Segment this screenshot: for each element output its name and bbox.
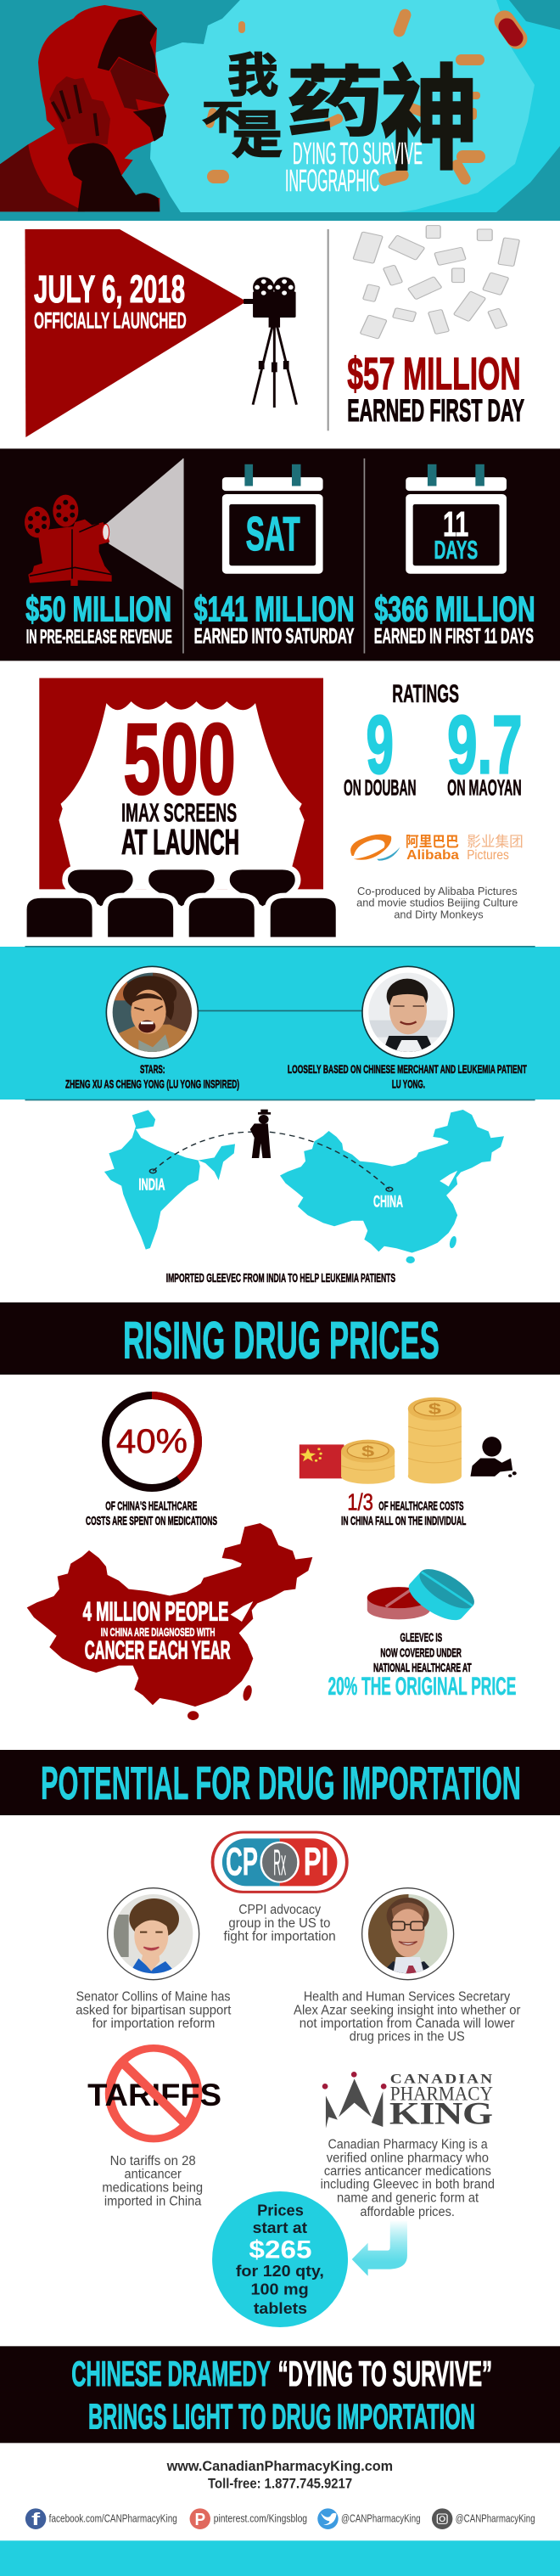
logo: CPPI: PI: [304, 1841, 328, 1884]
panel: launch date and first-day earnings: [25, 226, 524, 437]
stat: $141 million into Saturday: EARNED INTO SATURDAY: [194, 623, 355, 648]
portrait: Senator Collins: [108, 1888, 199, 1980]
Chinese film title: 不: [202, 99, 244, 137]
caption: one third of costs fall on individual: 1/3: [347, 1489, 373, 1516]
contact details: [166, 2459, 393, 2492]
social: Instagram: [432, 2508, 535, 2529]
chart: 40 percent ring: 40%: [116, 1423, 188, 1460]
callout: price circle: 100 mg: [251, 2281, 309, 2298]
stat: $50 million pre-release: [25, 590, 172, 648]
icon: coin stacks: $: [361, 1443, 375, 1460]
panel: stars and real-life inspiration: ZHENG XU AS CHENG YONG (LU YONG INSPIRED): [65, 1078, 239, 1091]
text: Canadian Pharmacy King description: name and generic form at: [337, 2190, 479, 2205]
text: cancer diagnosis stat on map: IN CHINA ARE DIAGNOSED WITH: [101, 1626, 215, 1640]
text: no tariffs: imported in China: [104, 2194, 202, 2208]
portrait: Alex Azar: [362, 1888, 454, 1980]
icon: red movie projector: [25, 495, 112, 586]
chart: 40 percent ring: [105, 1396, 199, 1488]
map: China in red: [27, 1523, 312, 1720]
social: Pinterest: [190, 2508, 307, 2529]
text: Senator Collins: [76, 1989, 232, 2031]
text: Canadian Pharmacy King description: affordable prices.: [360, 2204, 455, 2219]
logo: Alibaba Pictures: [350, 834, 524, 863]
stat: ratings: ON DOUBAN: [344, 775, 416, 800]
projector beam with launch date: JULY 6, 2018: [34, 268, 185, 311]
logo: Canadian Pharmacy King: CANADIAN: [390, 2071, 493, 2086]
stat: ratings: RATINGS: [392, 679, 459, 708]
closing banner: [0, 2346, 560, 2443]
caption: Gleevec covered at 20 percent of original price: [328, 1632, 516, 1700]
footer bar: [0, 2540, 560, 2576]
callout: price circle: start at: [253, 2219, 307, 2236]
social: Twitter: @CANPharmacyKing: [341, 2513, 421, 2525]
icon: China flag: [300, 1444, 344, 1478]
text: CPPI advocacy: CPPI advocacy: [238, 1902, 321, 1917]
stat: ratings: [344, 679, 523, 800]
text: Canadian Pharmacy King description: [321, 2137, 495, 2219]
arrow: pointing to price circle: [352, 2220, 407, 2276]
icon: coin stacks: $: [428, 1400, 442, 1417]
icon: man silhouette covering his ear: [0, 5, 169, 211]
text: co-production note: and movie studios Beijing Culture: [356, 897, 518, 908]
social: Facebook: f: [31, 2510, 40, 2528]
pills scattered around the title: [204, 7, 531, 187]
logo: CPPI: [212, 1832, 347, 1892]
callout: price circle: $265: [249, 2236, 312, 2264]
callout: price circle: tablets: [254, 2299, 307, 2317]
stat: ratings: 9: [367, 698, 394, 790]
social: Facebook: [25, 2508, 177, 2529]
caption: stars: STARS:: [140, 1064, 165, 1077]
illustration: theatre with curtains and seats: [0, 678, 560, 946]
contact details: Toll-free: 1.877.745.9217: [208, 2477, 352, 2492]
icon: man in hat walking: [250, 1110, 271, 1158]
callout: price circle: Prices: [257, 2202, 304, 2219]
Chinese film title: 我: [227, 49, 278, 102]
illustration: theatre with curtains and seats: IMAX SCREENS: [121, 798, 237, 827]
panel: drug price facts: OF HEALTHCARE COSTS: [378, 1500, 464, 1513]
caption: based on: [288, 1064, 527, 1091]
icon: no tariffs sign: TARIFFS: [87, 2078, 221, 2112]
icon: calendar 11 days: [406, 464, 507, 574]
banner: movie title header: [0, 0, 560, 221]
banner title: Dying to Survive Infographic: INFOGRAPHIC: [285, 163, 379, 198]
social: Pinterest: P: [194, 2510, 205, 2528]
text: Secretary Azar: drug prices in the US: [350, 2029, 465, 2044]
Chinese film title: 药: [286, 61, 384, 146]
text: Senator Collins: for importation reform: [92, 2016, 215, 2031]
logo: CPPI: Rx: [273, 1842, 286, 1883]
heading: Rising Drug Prices: [0, 1302, 560, 1375]
stat: $141 million into Saturday: [194, 590, 355, 648]
panel: stars and real-life inspiration: [0, 946, 560, 1285]
panel: importation advocates: [76, 1832, 521, 2219]
logo: Alibaba Pictures: 影业集团: [467, 834, 524, 850]
text: co-production note: Co-produced by Alibaba Pictures: [357, 885, 518, 897]
text: Senator Collins: Senator Collins of Maine has: [76, 1989, 231, 2004]
panel: box office stats band: [0, 448, 560, 946]
panel: drug price facts: [83, 1398, 517, 1700]
icon: calendar 11 days: DAYS: [434, 535, 478, 564]
social: Facebook: facebook.com/CANPharmacyKing: [49, 2513, 177, 2525]
text: Canadian Pharmacy King description: Canadian Pharmacy King is a: [328, 2137, 488, 2151]
closing banner: CHINESE DRAMEDY: [71, 2354, 271, 2393]
icon: Gleevec pills: [367, 1562, 482, 1627]
text: CPPI advocacy: [224, 1902, 336, 1943]
caption: one third of costs fall on individual: [341, 1489, 467, 1528]
text: co-production note: [356, 885, 518, 920]
logo: CPPI: CP: [226, 1841, 258, 1884]
contact details: www.CanadianPharmacyKing.com: [166, 2459, 393, 2474]
text: cancer diagnosis stat on map: 4 MILLION PEOPLE: [83, 1597, 228, 1627]
stat: $50 million pre-release: IN PRE-RELEASE REVENUE: [26, 626, 172, 648]
text: Canadian Pharmacy King description: including Gleevec in both brand: [321, 2177, 495, 2191]
logo: Alibaba Pictures: Alibaba: [406, 847, 460, 863]
stat: $366 million in first 11 days: [374, 590, 535, 648]
arrow: dashed route from India to China: [149, 1132, 393, 1191]
panel: price callout and footer: [0, 2191, 560, 2576]
icon: no tariffs sign: [87, 2048, 221, 2139]
text: CPPI advocacy: group in the US to: [228, 1915, 330, 1931]
Chinese film title: 神: [380, 56, 479, 184]
text: Secretary Azar: [294, 1989, 521, 2044]
caption: healthcare spending on medications: OF CHINA'S HEALTHCARE: [105, 1500, 198, 1513]
logo: Canadian Pharmacy King: PHARMACY: [390, 2082, 493, 2105]
map: India: [104, 1110, 235, 1250]
logo: Canadian Pharmacy King: [322, 2071, 493, 2131]
map: India: INDIA: [138, 1175, 165, 1194]
stat: $57 million earned first day: [347, 348, 524, 428]
Chinese film title: 是: [232, 107, 283, 164]
text: no tariffs: anticancer: [125, 2167, 182, 2181]
map: China in cyan: CHINA: [373, 1193, 403, 1212]
caption: Gleevec covered at 20 percent of original price: GLEEVEC IS: [400, 1632, 442, 1645]
projector beam with launch date: OFFICIALLY LAUNCHED: [34, 309, 187, 334]
projector beam with launch date: [25, 229, 246, 437]
stat: $141 million into Saturday: $141 MILLION: [194, 590, 355, 629]
caption: based on: LU YONG.: [392, 1078, 425, 1091]
illustration: theatre with curtains and seats: AT LAUNCH: [121, 823, 239, 863]
caption: Gleevec covered at 20 percent of original price: NOW COVERED UNDER: [380, 1646, 462, 1660]
social: Pinterest: pinterest.com/Kingsblog: [214, 2513, 307, 2525]
caption: healthcare spending on medications: [86, 1500, 217, 1528]
portrait: Lu Yong: [362, 966, 454, 1058]
icon: calendar 11 days: 11: [443, 505, 468, 544]
banner title: Dying to Survive Infographic: [285, 136, 423, 198]
text: Canadian Pharmacy King description: carries anticancer medications: [324, 2163, 491, 2179]
stat: $50 million pre-release: $50 MILLION: [25, 590, 171, 629]
projector beam: [105, 458, 183, 590]
icon: coin stacks: [341, 1398, 462, 1484]
callout: price circle: [212, 2191, 348, 2327]
panel: drug price facts: CANCER EACH YEAR: [85, 1636, 231, 1664]
text: CPPI advocacy: fight for importation: [224, 1929, 336, 1943]
icon: falling money bills: [353, 226, 519, 339]
text: Canadian Pharmacy King description: verified online pharmacy who: [327, 2150, 489, 2165]
panel: drug price facts: COSTS ARE SPENT ON MEDICATIONS: [86, 1515, 217, 1528]
text: no tariffs: medications being: [102, 2180, 203, 2195]
logo: Alibaba Pictures: Pictures: [467, 847, 509, 863]
portrait: Zheng Xu: [106, 966, 198, 1058]
map: China in cyan: [280, 1110, 504, 1263]
text: no tariffs: [102, 2153, 203, 2208]
Chinese film title: [202, 49, 479, 184]
illustration: theatre with curtains and seats: 500: [123, 704, 236, 816]
callout: price circle: for 120 qty,: [236, 2262, 324, 2280]
text: Senator Collins: asked for bipartisan support: [76, 2002, 232, 2017]
social: Twitter: [317, 2508, 421, 2529]
icon: film camera on tripod: [244, 277, 296, 408]
caption: stars: [65, 1064, 239, 1091]
icon: calendar SAT: SAT: [246, 507, 300, 561]
logo: Alibaba Pictures: 阿里巴巴: [406, 834, 459, 850]
icon: calendar SAT: [222, 464, 323, 574]
text: no tariffs: No tariffs on 28: [110, 2153, 196, 2168]
text: co-production note: and Dirty Monkeys: [394, 908, 484, 920]
text: cancer diagnosis stat on map: [83, 1597, 231, 1664]
logo: Canadian Pharmacy King: KING: [389, 2097, 493, 2131]
icon: person with pills: [470, 1437, 517, 1477]
